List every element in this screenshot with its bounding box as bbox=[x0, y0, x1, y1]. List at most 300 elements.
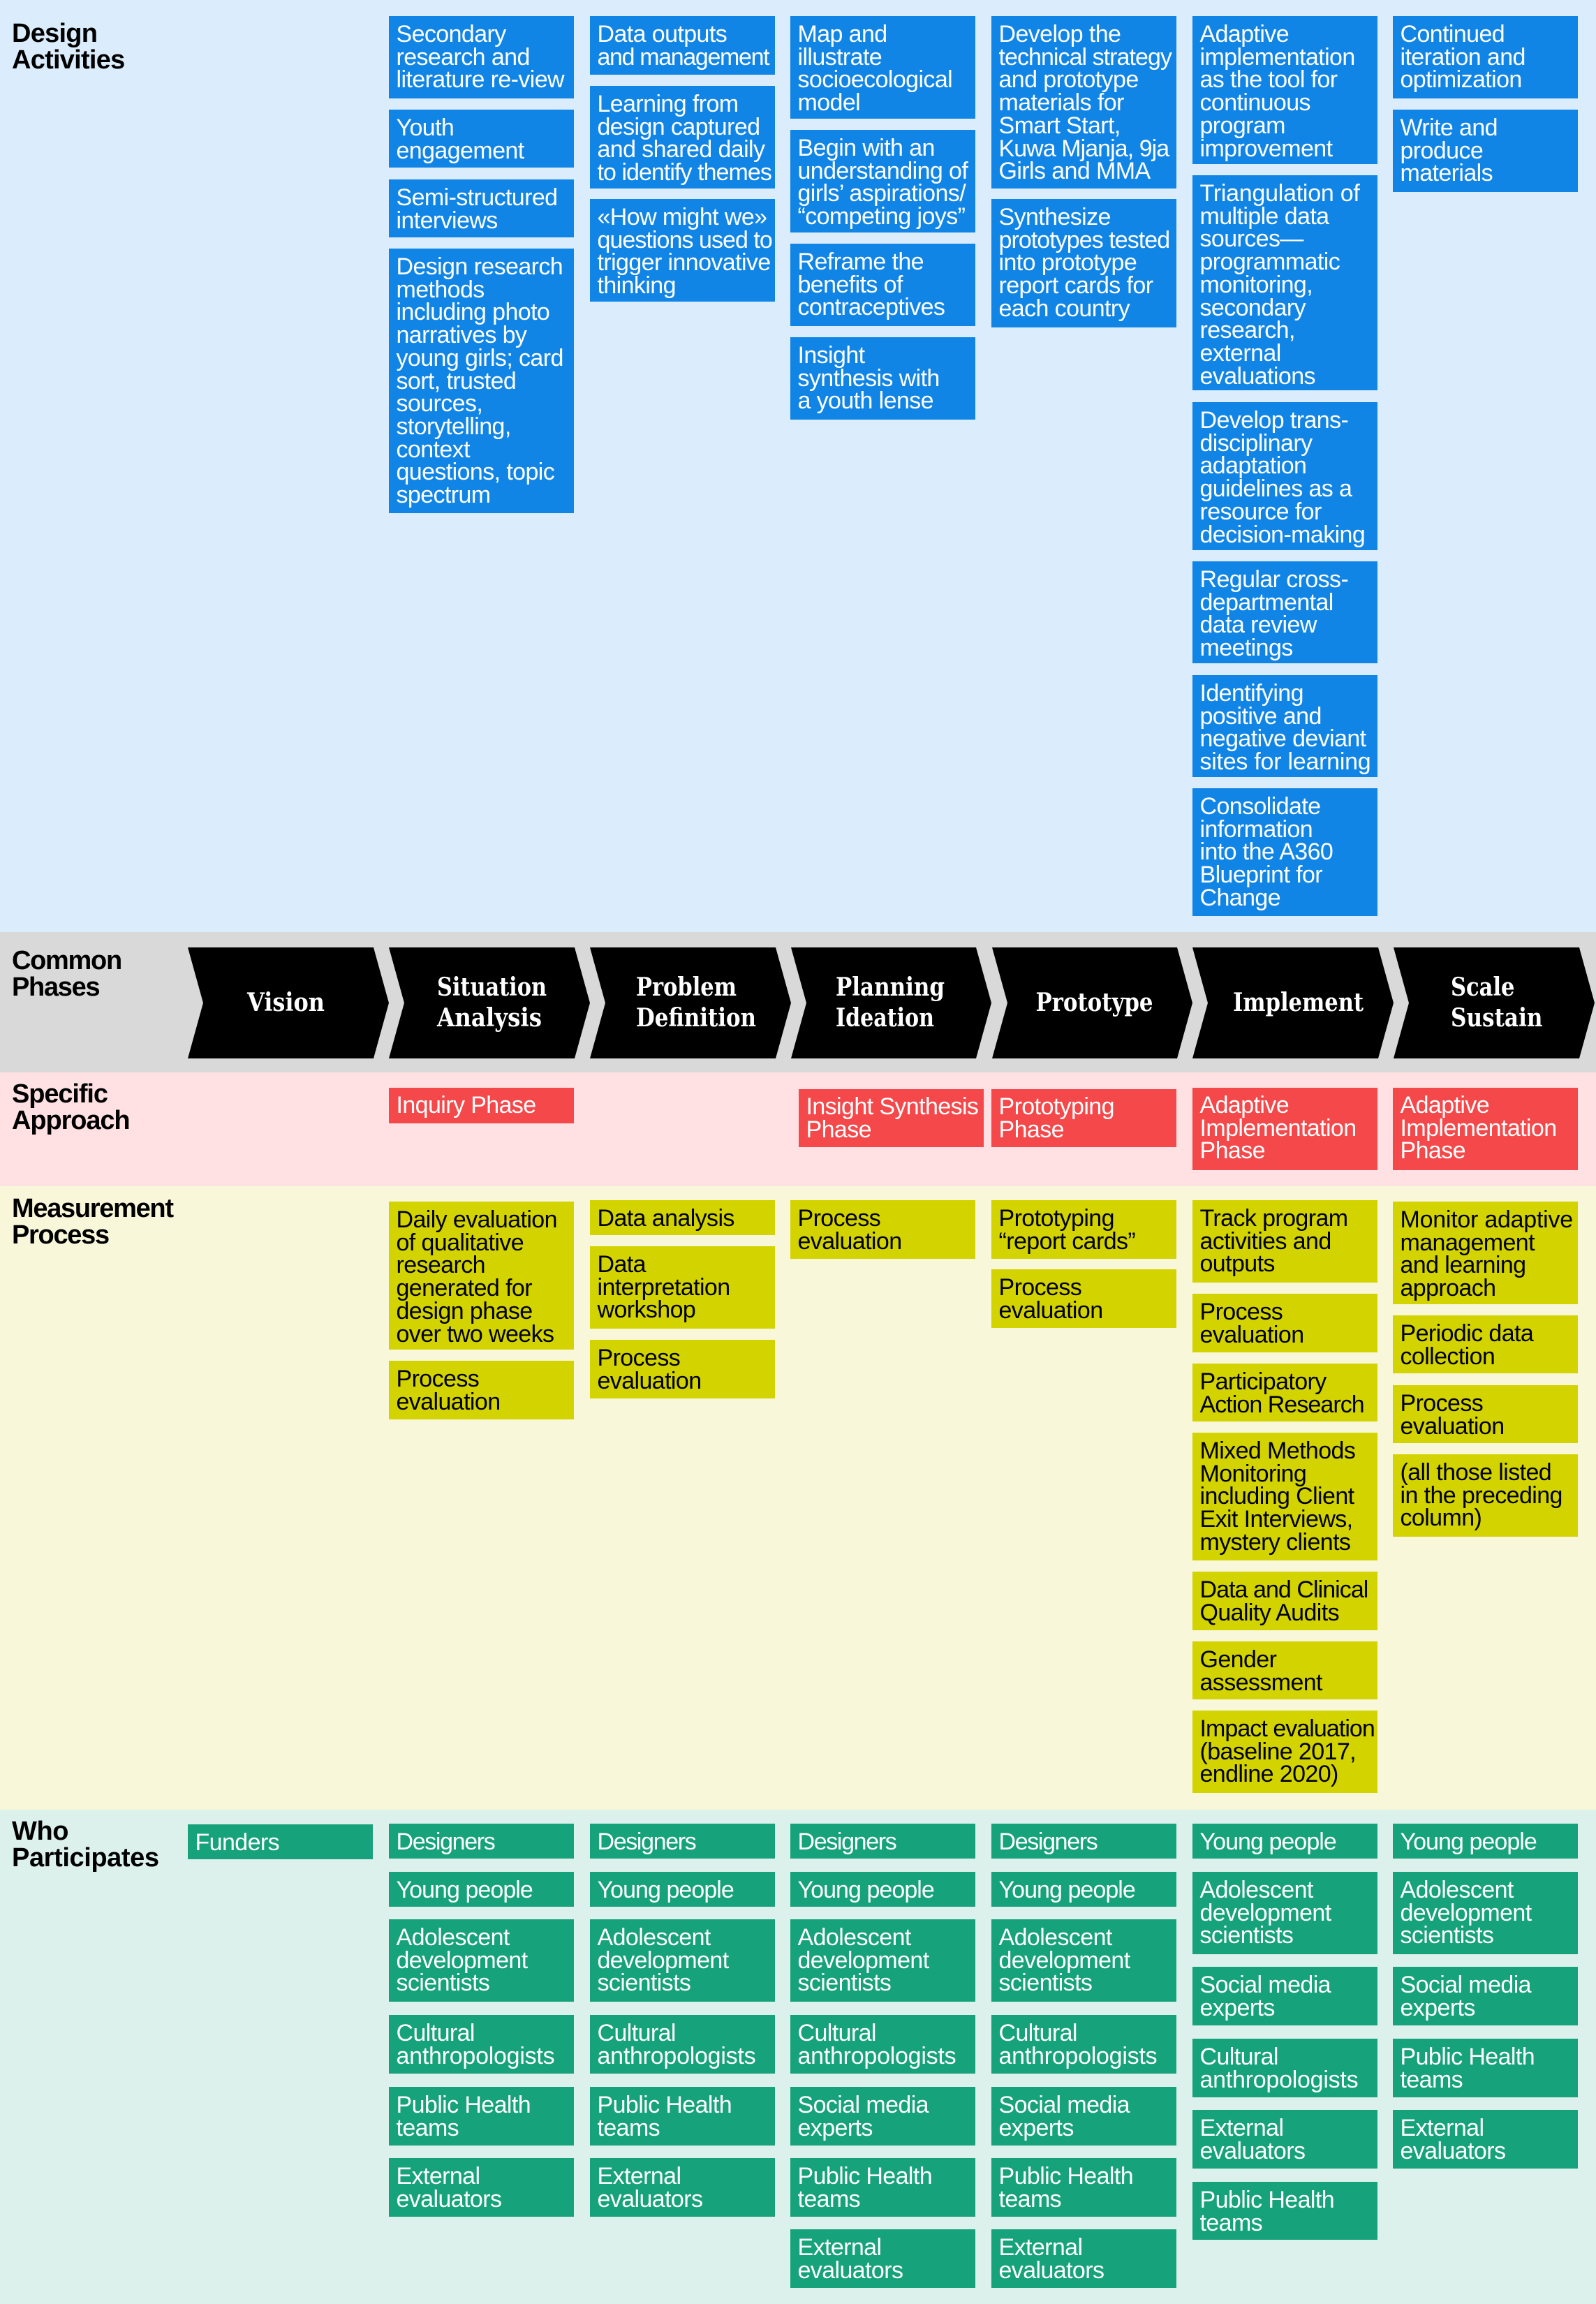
participant: public health teams bbox=[389, 2087, 574, 2146]
activity: how might we questions: «How might we» bbox=[598, 204, 767, 230]
participant: young people: Young people bbox=[397, 1877, 533, 1903]
measure: mixed methods monitoring: Mixed Methods bbox=[1199, 1438, 1355, 1464]
activity: girls aspirations: Begin with an bbox=[797, 135, 935, 161]
activity: girls aspirations bbox=[790, 130, 975, 232]
measure: periodic data collection: collection bbox=[1401, 1343, 1495, 1370]
chevron: planning ideation bbox=[791, 947, 991, 1058]
chevron: implement bbox=[1192, 947, 1394, 1058]
activity: produce materials bbox=[1393, 110, 1578, 192]
activity: deviant sites: negative deviant bbox=[1199, 725, 1366, 752]
activity: insight synthesis: Insight bbox=[797, 342, 864, 369]
participant: cultural anthropologists: Cultural bbox=[797, 2020, 876, 2046]
participant: public health teams: Public Health bbox=[1401, 2044, 1535, 2070]
chevron: prototype: Prototype bbox=[1036, 988, 1153, 1017]
activity: learning from design: and shared daily bbox=[598, 136, 764, 163]
activity: synthesize prototypes: report cards for bbox=[998, 272, 1153, 299]
chevron: implement: Implement bbox=[1233, 988, 1364, 1017]
measure: prototyping report cards bbox=[991, 1200, 1176, 1259]
measure: periodic data collection bbox=[1393, 1315, 1578, 1373]
measure: process evaluation: evaluation bbox=[598, 1368, 702, 1394]
chevron: situation analysis: Situation bbox=[437, 973, 547, 1002]
participant: public health teams: Public Health bbox=[1199, 2187, 1334, 2213]
participant: adolescent scientists bbox=[1393, 1872, 1578, 1954]
participant: external evaluators: External bbox=[797, 2234, 881, 2261]
heading: design activities: Activities bbox=[12, 45, 124, 74]
participant: young people bbox=[1192, 1824, 1377, 1859]
participant: cultural anthropologists bbox=[991, 2015, 1176, 2074]
activity: produce materials: Write and bbox=[1401, 115, 1498, 141]
approach: insight synthesis phase: Phase bbox=[806, 1116, 871, 1143]
activity: secondary research: research and bbox=[397, 44, 530, 71]
activity: youth engagement: engagement bbox=[397, 138, 524, 164]
measure: process evaluation: Process bbox=[797, 1205, 880, 1232]
activity: A360 blueprint bbox=[1192, 788, 1377, 916]
participant: public health teams: teams bbox=[1199, 2210, 1262, 2236]
measure: process evaluation: Process bbox=[1199, 1299, 1283, 1325]
activity: semi-structured interviews: Semi-structured bbox=[397, 184, 557, 211]
activity: data outputs: Data outputs bbox=[598, 21, 727, 47]
heading: who participates: Who bbox=[12, 1817, 68, 1846]
participant: adolescent scientists: Adolescent bbox=[1401, 1877, 1514, 1903]
participant: external evaluators bbox=[1192, 2110, 1377, 2169]
participant: cultural anthropologists bbox=[790, 2015, 975, 2074]
participant: adolescent scientists: scientists bbox=[598, 1970, 690, 1996]
participant: adolescent scientists bbox=[1192, 1872, 1377, 1954]
chevron: vision: Vision bbox=[246, 988, 325, 1017]
participant: social media experts: experts bbox=[797, 2115, 873, 2141]
participant: public health teams bbox=[1393, 2039, 1578, 2097]
approach: insight synthesis phase: Insight Synthesis bbox=[806, 1093, 978, 1120]
approach: prototyping phase: Prototyping bbox=[998, 1093, 1114, 1120]
approach: adaptive implementation phase: Phase bbox=[1199, 1137, 1265, 1164]
activity: data outputs bbox=[590, 16, 775, 75]
participant: designers bbox=[790, 1824, 975, 1859]
activity: socioecological model bbox=[790, 16, 975, 119]
participant: external evaluators bbox=[590, 2158, 775, 2217]
chevron: scale sustain: Sustain bbox=[1451, 1003, 1543, 1033]
participant: cultural anthropologists: Cultural bbox=[397, 2020, 475, 2046]
participant: social media experts: Social media bbox=[998, 2092, 1130, 2118]
chevron: planning ideation: Ideation bbox=[836, 1003, 934, 1033]
activity: technical strategy: Develop the bbox=[998, 21, 1121, 47]
heading: measurement process: Process bbox=[12, 1220, 109, 1250]
activity: socioecological model: socioecological bbox=[797, 66, 952, 93]
activity: data review meetings: data review bbox=[1199, 612, 1317, 638]
heading: specific approach: Specific bbox=[12, 1079, 108, 1109]
participant: external evaluators bbox=[790, 2229, 975, 2288]
activity: reframe contraceptives bbox=[790, 244, 975, 326]
measure: daily evaluation bbox=[389, 1202, 574, 1350]
activity: adaptive implementation: program bbox=[1199, 112, 1285, 139]
activity: adaptive implementation: continuous bbox=[1199, 89, 1310, 116]
activity: deviant sites: Identifying bbox=[1199, 680, 1303, 707]
activity: design research methods: narratives by bbox=[397, 322, 526, 348]
activity: design research methods: young girls; card bbox=[397, 345, 563, 371]
measure: mixed methods monitoring: mystery clients bbox=[1199, 1529, 1350, 1556]
measure: process evaluation: evaluation bbox=[397, 1389, 501, 1415]
participant: cultural anthropologists: anthropologists bbox=[598, 2043, 755, 2069]
participant: young people: Young people bbox=[1199, 1829, 1336, 1855]
participant: young people bbox=[991, 1872, 1176, 1907]
participant: young people: Young people bbox=[1401, 1829, 1537, 1855]
activity: girls aspirations: “competing joys” bbox=[797, 203, 965, 230]
measure: all preceding bbox=[1393, 1454, 1578, 1537]
approach: adaptive implementation phase, scale: Implementation bbox=[1401, 1115, 1557, 1142]
chevron: prototype bbox=[992, 947, 1192, 1058]
activity: triangulation bbox=[1192, 175, 1377, 390]
measure: participatory action research: Participatory bbox=[1199, 1368, 1327, 1395]
measure: interpretation workshop: Data bbox=[598, 1251, 646, 1278]
approach: inquiry phase: Inquiry Phase bbox=[397, 1092, 536, 1118]
measure: daily evaluation: of qualitative bbox=[397, 1229, 524, 1256]
chevron: problem definition bbox=[590, 947, 791, 1058]
participant: designers bbox=[389, 1824, 574, 1859]
activity: A360 blueprint: information bbox=[1199, 816, 1313, 843]
activity: adaptation guidelines: resource for bbox=[1199, 499, 1322, 525]
measure: impact evaluation: Impact evaluation bbox=[1199, 1715, 1375, 1742]
participant: cultural anthropologists bbox=[590, 2015, 775, 2074]
activity: triangulation: monitoring, bbox=[1199, 272, 1313, 298]
activity: deviant sites: positive and bbox=[1199, 703, 1322, 730]
participant: adolescent scientists: scientists bbox=[797, 1970, 891, 1996]
participant: public health teams: Public Health bbox=[998, 2163, 1133, 2189]
activity: girls aspirations: girls’ aspirations/ bbox=[797, 180, 966, 207]
participant: social media experts bbox=[790, 2087, 975, 2146]
measure: process evaluation bbox=[790, 1200, 975, 1259]
participant: social media experts: experts bbox=[998, 2115, 1074, 2141]
participant: social media experts bbox=[1393, 1967, 1578, 2025]
participant: adolescent scientists: development bbox=[1401, 1900, 1532, 1926]
measure: process evaluation bbox=[389, 1361, 574, 1419]
activity: data outputs: and management bbox=[598, 44, 769, 71]
participant: adolescent scientists: development bbox=[797, 1947, 929, 1974]
measure: impact evaluation: (baseline 2017, bbox=[1199, 1738, 1356, 1765]
measure: monitor adaptive management: and learning bbox=[1401, 1252, 1525, 1278]
participant: young people bbox=[389, 1872, 574, 1907]
measure: data analysis bbox=[590, 1200, 775, 1235]
approach: adaptive implementation phase: Adaptive bbox=[1199, 1092, 1289, 1118]
participant: external evaluators: evaluators bbox=[1199, 2138, 1305, 2164]
measure: interpretation workshop bbox=[590, 1246, 775, 1329]
activity: design research methods: Design research bbox=[397, 253, 563, 280]
participant: designers: Designers bbox=[797, 1829, 896, 1855]
activity: learning from design: to identify themes bbox=[598, 159, 771, 186]
participant: public health teams: teams bbox=[397, 2115, 459, 2141]
approach: adaptive implementation phase, scale: Phase bbox=[1401, 1137, 1465, 1164]
activity: design research methods: sources, bbox=[397, 390, 482, 417]
participant: social media experts bbox=[1192, 1967, 1377, 2025]
measure: participatory action research: Action Research bbox=[1199, 1391, 1364, 1418]
measure: interpretation workshop: workshop bbox=[598, 1297, 695, 1323]
participant: young people: Young people bbox=[797, 1877, 934, 1903]
measure: quality audits: Data and Clinical bbox=[1199, 1576, 1368, 1603]
chevron: vision bbox=[188, 947, 389, 1058]
activity: data review meetings: Regular cross- bbox=[1199, 566, 1348, 593]
participant: adolescent scientists bbox=[389, 1919, 574, 2002]
measure: process evaluation: Process bbox=[1401, 1390, 1483, 1417]
heading: specific approach bbox=[12, 1079, 130, 1135]
activity: design research methods: spectrum bbox=[397, 482, 491, 508]
participant: social media experts: experts bbox=[1199, 1995, 1275, 2021]
participant: external evaluators bbox=[389, 2158, 574, 2217]
measure: mixed methods monitoring: including Client bbox=[1199, 1483, 1354, 1509]
activity: design research methods bbox=[389, 249, 574, 513]
measure: quality audits: Quality Audits bbox=[1199, 1600, 1339, 1626]
activity: technical strategy: technical strategy bbox=[998, 44, 1172, 71]
measure: monitor adaptive management: approach bbox=[1401, 1275, 1495, 1301]
measure: impact evaluation: endline 2020) bbox=[1199, 1761, 1338, 1787]
measure: prototyping report cards: “report cards” bbox=[998, 1228, 1135, 1255]
panel: specific approach bbox=[0, 1072, 1596, 1186]
activity: youth engagement: Youth bbox=[397, 115, 454, 141]
participant: external evaluators: External bbox=[1199, 2115, 1283, 2141]
activity: triangulation: external bbox=[1199, 340, 1281, 367]
activity: socioecological model: illustrate bbox=[797, 44, 882, 71]
activity: adaptive implementation bbox=[1192, 16, 1377, 164]
activity: technical strategy bbox=[991, 16, 1176, 189]
chevron: situation analysis: Analysis bbox=[436, 1003, 542, 1033]
measure: daily evaluation: design phase bbox=[397, 1298, 533, 1324]
measure: process evaluation bbox=[590, 1340, 775, 1398]
measure: periodic data collection: Periodic data bbox=[1401, 1320, 1533, 1347]
measure: process evaluation: evaluation bbox=[797, 1228, 902, 1255]
chevron: planning ideation: Planning bbox=[836, 973, 945, 1002]
measure: process evaluation bbox=[991, 1269, 1176, 1328]
activity: triangulation: sources— bbox=[1199, 226, 1303, 252]
activity: triangulation: Triangulation of bbox=[1199, 180, 1360, 207]
measure: process evaluation: evaluation bbox=[998, 1297, 1103, 1324]
participant: social media experts: Social media bbox=[797, 2092, 929, 2118]
participant: external evaluators: evaluators bbox=[1401, 2138, 1505, 2164]
activity: semi-structured interviews: interviews bbox=[397, 207, 498, 234]
participant: public health teams: Public Health bbox=[598, 2092, 732, 2118]
activity: learning from design: Learning from bbox=[598, 91, 738, 117]
participant: external evaluators: evaluators bbox=[998, 2257, 1104, 2284]
measure: quality audits bbox=[1192, 1572, 1377, 1630]
participant: adolescent scientists: Adolescent bbox=[397, 1924, 510, 1951]
heading: measurement process bbox=[12, 1194, 174, 1250]
activity: secondary research bbox=[389, 16, 574, 98]
participant: public health teams: teams bbox=[797, 2186, 860, 2213]
heading: measurement process: Measurement bbox=[12, 1194, 173, 1223]
participant: public health teams bbox=[1192, 2182, 1377, 2240]
participant: adolescent scientists: scientists bbox=[1199, 1922, 1293, 1949]
heading: who participates: Participates bbox=[12, 1843, 159, 1873]
measure: daily evaluation: generated for bbox=[397, 1275, 532, 1301]
measure: monitor adaptive management: Monitor adaptive bbox=[1401, 1206, 1573, 1233]
activity: design research methods: methods bbox=[397, 276, 485, 303]
activity: learning from design bbox=[590, 86, 775, 189]
chevron: scale sustain: Scale bbox=[1451, 973, 1515, 1002]
measure: process evaluation bbox=[1393, 1385, 1578, 1443]
chevron: scale sustain bbox=[1394, 947, 1595, 1058]
participant: external evaluators: External bbox=[998, 2234, 1082, 2261]
participant: adolescent scientists: Adolescent bbox=[598, 1924, 711, 1951]
activity: A360 blueprint: into the A360 bbox=[1199, 839, 1333, 865]
participant: external evaluators: evaluators bbox=[598, 2186, 702, 2213]
activity: adaptive implementation: implementation bbox=[1199, 44, 1355, 71]
participant: designers: Designers bbox=[397, 1829, 494, 1855]
measure: monitor adaptive management: management bbox=[1401, 1229, 1535, 1256]
activity: triangulation: programmatic bbox=[1199, 249, 1340, 275]
panel: measurement process bbox=[0, 1186, 1596, 1810]
measure: all preceding: in the preceding bbox=[1401, 1482, 1562, 1509]
heading: common phases bbox=[12, 946, 121, 1001]
activity: technical strategy: materials for bbox=[998, 89, 1124, 116]
heading: specific approach: Approach bbox=[12, 1106, 130, 1135]
participant: designers: Designers bbox=[598, 1829, 695, 1855]
activity: socioecological model: Map and bbox=[797, 21, 887, 47]
participant: adolescent scientists: scientists bbox=[1401, 1922, 1493, 1949]
activity: adaptation guidelines: disciplinary bbox=[1199, 430, 1312, 457]
activity: design research methods: questions, topic bbox=[397, 459, 554, 485]
participant: designers bbox=[991, 1824, 1176, 1859]
chevron: problem definition: Definition bbox=[636, 1003, 756, 1033]
measure: track program activities: Track program bbox=[1199, 1205, 1347, 1232]
measure: prototyping report cards: Prototyping bbox=[998, 1205, 1114, 1232]
measure: all preceding: column) bbox=[1401, 1505, 1482, 1531]
participant: young people bbox=[1393, 1824, 1578, 1859]
activity: produce materials: produce bbox=[1401, 138, 1483, 164]
participant: young people bbox=[590, 1872, 775, 1907]
heading: design activities: Design bbox=[12, 19, 97, 48]
measure: gender assessment: assessment bbox=[1199, 1669, 1322, 1696]
activity: triangulation: research, bbox=[1199, 317, 1295, 344]
measure: process evaluation: Process bbox=[598, 1345, 680, 1371]
activity: data review meetings: meetings bbox=[1199, 635, 1293, 661]
activity: deviant sites bbox=[1192, 675, 1377, 777]
activity: design research methods: context bbox=[397, 436, 470, 463]
participant: funders bbox=[188, 1824, 373, 1859]
participant: adolescent scientists: development bbox=[998, 1947, 1130, 1974]
activity: insight synthesis bbox=[790, 337, 975, 420]
activity: reframe contraceptives: Reframe the bbox=[797, 249, 924, 275]
participant: public health teams: teams bbox=[998, 2186, 1061, 2213]
participant: adolescent scientists bbox=[790, 1919, 975, 2002]
measure: interpretation workshop: interpretation bbox=[598, 1274, 730, 1301]
participant: social media experts bbox=[991, 2087, 1176, 2146]
participant: social media experts: Social media bbox=[1401, 1972, 1531, 1998]
measure: track program activities bbox=[1192, 1200, 1377, 1283]
activity: adaptation guidelines: Develop trans- bbox=[1199, 407, 1348, 434]
activity: synthesize prototypes bbox=[991, 199, 1176, 327]
measure: process evaluation: Process bbox=[998, 1274, 1081, 1301]
participant: adolescent scientists: Adolescent bbox=[998, 1924, 1112, 1951]
activity: adaptation guidelines bbox=[1192, 402, 1377, 550]
participant: public health teams: teams bbox=[598, 2115, 660, 2141]
participant: adolescent scientists bbox=[991, 1919, 1176, 2002]
activity: technical strategy: and prototype bbox=[998, 66, 1139, 93]
participant: adolescent scientists: development bbox=[397, 1947, 528, 1974]
participant: cultural anthropologists: Cultural bbox=[998, 2020, 1077, 2046]
approach: prototyping phase bbox=[991, 1089, 1176, 1147]
participant: external evaluators: External bbox=[598, 2163, 681, 2189]
participant: young people: Young people bbox=[598, 1877, 734, 1903]
panel: common phases bbox=[0, 932, 1596, 1072]
measure: impact evaluation bbox=[1192, 1711, 1377, 1793]
activity: secondary research: Secondary bbox=[397, 21, 506, 47]
participant: cultural anthropologists: anthropologists bbox=[1199, 2067, 1358, 2093]
measure: track program activities: outputs bbox=[1199, 1250, 1275, 1277]
activity: socioecological model: model bbox=[797, 89, 860, 116]
activity: continued iteration bbox=[1393, 16, 1578, 98]
participant: designers bbox=[590, 1824, 775, 1859]
participant: cultural anthropologists bbox=[1192, 2039, 1377, 2097]
activity: insight synthesis: a youth lense bbox=[797, 387, 933, 414]
participant: external evaluators bbox=[991, 2229, 1176, 2288]
activity: A360 blueprint: Consolidate bbox=[1199, 793, 1320, 820]
approach: adaptive implementation phase, scale bbox=[1393, 1088, 1578, 1170]
activity: triangulation: multiple data bbox=[1199, 203, 1329, 230]
participant: funders: Funders bbox=[195, 1829, 279, 1856]
approach: adaptive implementation phase, scale: Adaptive bbox=[1401, 1092, 1489, 1118]
measure: process evaluation bbox=[1192, 1294, 1377, 1352]
participant: social media experts: Social media bbox=[1199, 1972, 1331, 1998]
participant: cultural anthropologists: Cultural bbox=[598, 2020, 676, 2046]
participant: adolescent scientists: Adolescent bbox=[1199, 1877, 1313, 1903]
participant: external evaluators: External bbox=[1401, 2115, 1484, 2141]
heading: common phases: Phases bbox=[12, 972, 99, 1001]
participant: external evaluators: evaluators bbox=[797, 2257, 903, 2284]
measure: all preceding: (all those listed bbox=[1401, 1459, 1551, 1486]
participant: external evaluators: External bbox=[397, 2163, 480, 2189]
activity: adaptation guidelines: guidelines as a bbox=[1199, 475, 1352, 502]
activity: synthesize prototypes: prototypes tested bbox=[998, 227, 1169, 253]
activity: technical strategy: Kuwa Mjanja, 9ja bbox=[998, 135, 1169, 162]
approach: insight synthesis phase bbox=[799, 1089, 984, 1147]
activity: girls aspirations: understanding of bbox=[797, 158, 968, 184]
activity: adaptation guidelines: adaptation bbox=[1199, 452, 1306, 479]
measure: gender assessment bbox=[1192, 1641, 1377, 1699]
activity: design research methods: sort, trusted bbox=[397, 368, 516, 394]
activity: technical strategy: Girls and MMA bbox=[998, 158, 1151, 184]
panel: design activities bbox=[0, 0, 1596, 932]
approach: prototyping phase: Phase bbox=[998, 1116, 1064, 1143]
participant: designers: Designers bbox=[998, 1829, 1097, 1855]
activity: continued iteration: iteration and bbox=[1401, 44, 1525, 71]
measure: mixed methods monitoring: Exit Interviews, bbox=[1199, 1506, 1353, 1533]
measure: mixed methods monitoring: Monitoring bbox=[1199, 1461, 1306, 1487]
participant: cultural anthropologists: anthropologists bbox=[397, 2043, 554, 2069]
panel: who participates bbox=[0, 1810, 1596, 2304]
activity: reframe contraceptives: benefits of bbox=[797, 272, 903, 298]
participant: young people: Young people bbox=[998, 1877, 1135, 1903]
measure: process evaluation: evaluation bbox=[1401, 1413, 1505, 1440]
participant: public health teams bbox=[590, 2087, 775, 2146]
activity: design research methods: storytelling, bbox=[397, 413, 511, 440]
heading: common phases: Common bbox=[12, 946, 121, 975]
activity: triangulation: evaluations bbox=[1199, 363, 1315, 390]
measure: track program activities: activities and bbox=[1199, 1228, 1331, 1255]
activity: learning from design: design captured bbox=[598, 114, 760, 140]
activity: adaptation guidelines: decision-making bbox=[1199, 522, 1365, 548]
measure: daily evaluation: research bbox=[397, 1252, 485, 1278]
activity: produce materials: materials bbox=[1401, 160, 1493, 186]
activity: youth engagement bbox=[389, 110, 574, 168]
chevron row bbox=[188, 947, 1595, 1058]
activity: design research methods: including photo bbox=[397, 299, 549, 325]
activity: how might we questions: questions used to bbox=[598, 227, 772, 253]
activity: technical strategy: Smart Start, bbox=[998, 112, 1121, 139]
participant: adolescent scientists: development bbox=[1199, 1900, 1331, 1926]
measure: mixed methods monitoring bbox=[1192, 1433, 1377, 1560]
activity: A360 blueprint: Blueprint for bbox=[1199, 862, 1322, 888]
activity: how might we questions: thinking bbox=[598, 272, 676, 299]
activity: synthesize prototypes: into prototype bbox=[998, 249, 1137, 276]
activity: A360 blueprint: Change bbox=[1199, 885, 1280, 911]
measure: monitor adaptive management bbox=[1393, 1202, 1578, 1304]
participant: cultural anthropologists bbox=[389, 2015, 574, 2074]
